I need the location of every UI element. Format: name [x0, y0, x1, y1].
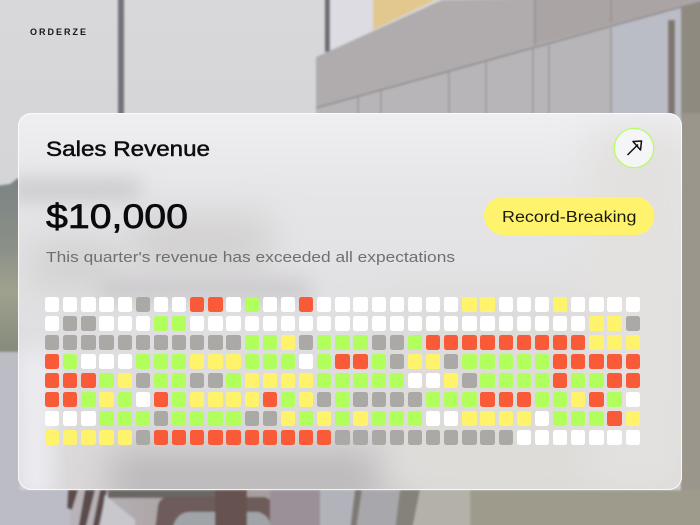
- chart: revenue status grid: [45, 297, 640, 445]
- badge: Record-Breaking: Record-Breaking: [502, 209, 636, 226]
- brand wordmark: ORDERZE: [30, 27, 86, 37]
- icon: arrow button: [614, 128, 654, 168]
- heading: Sales Revenue: Sales Revenue: [46, 137, 210, 161]
- badge: Record-Breaking: [484, 197, 654, 235]
- description text: This quarter's revenue has exceeded all expectations: [46, 249, 455, 266]
- panel: sales revenue card: [10, 113, 690, 510]
- metric: revenue amount: $10,000: [46, 198, 188, 236]
